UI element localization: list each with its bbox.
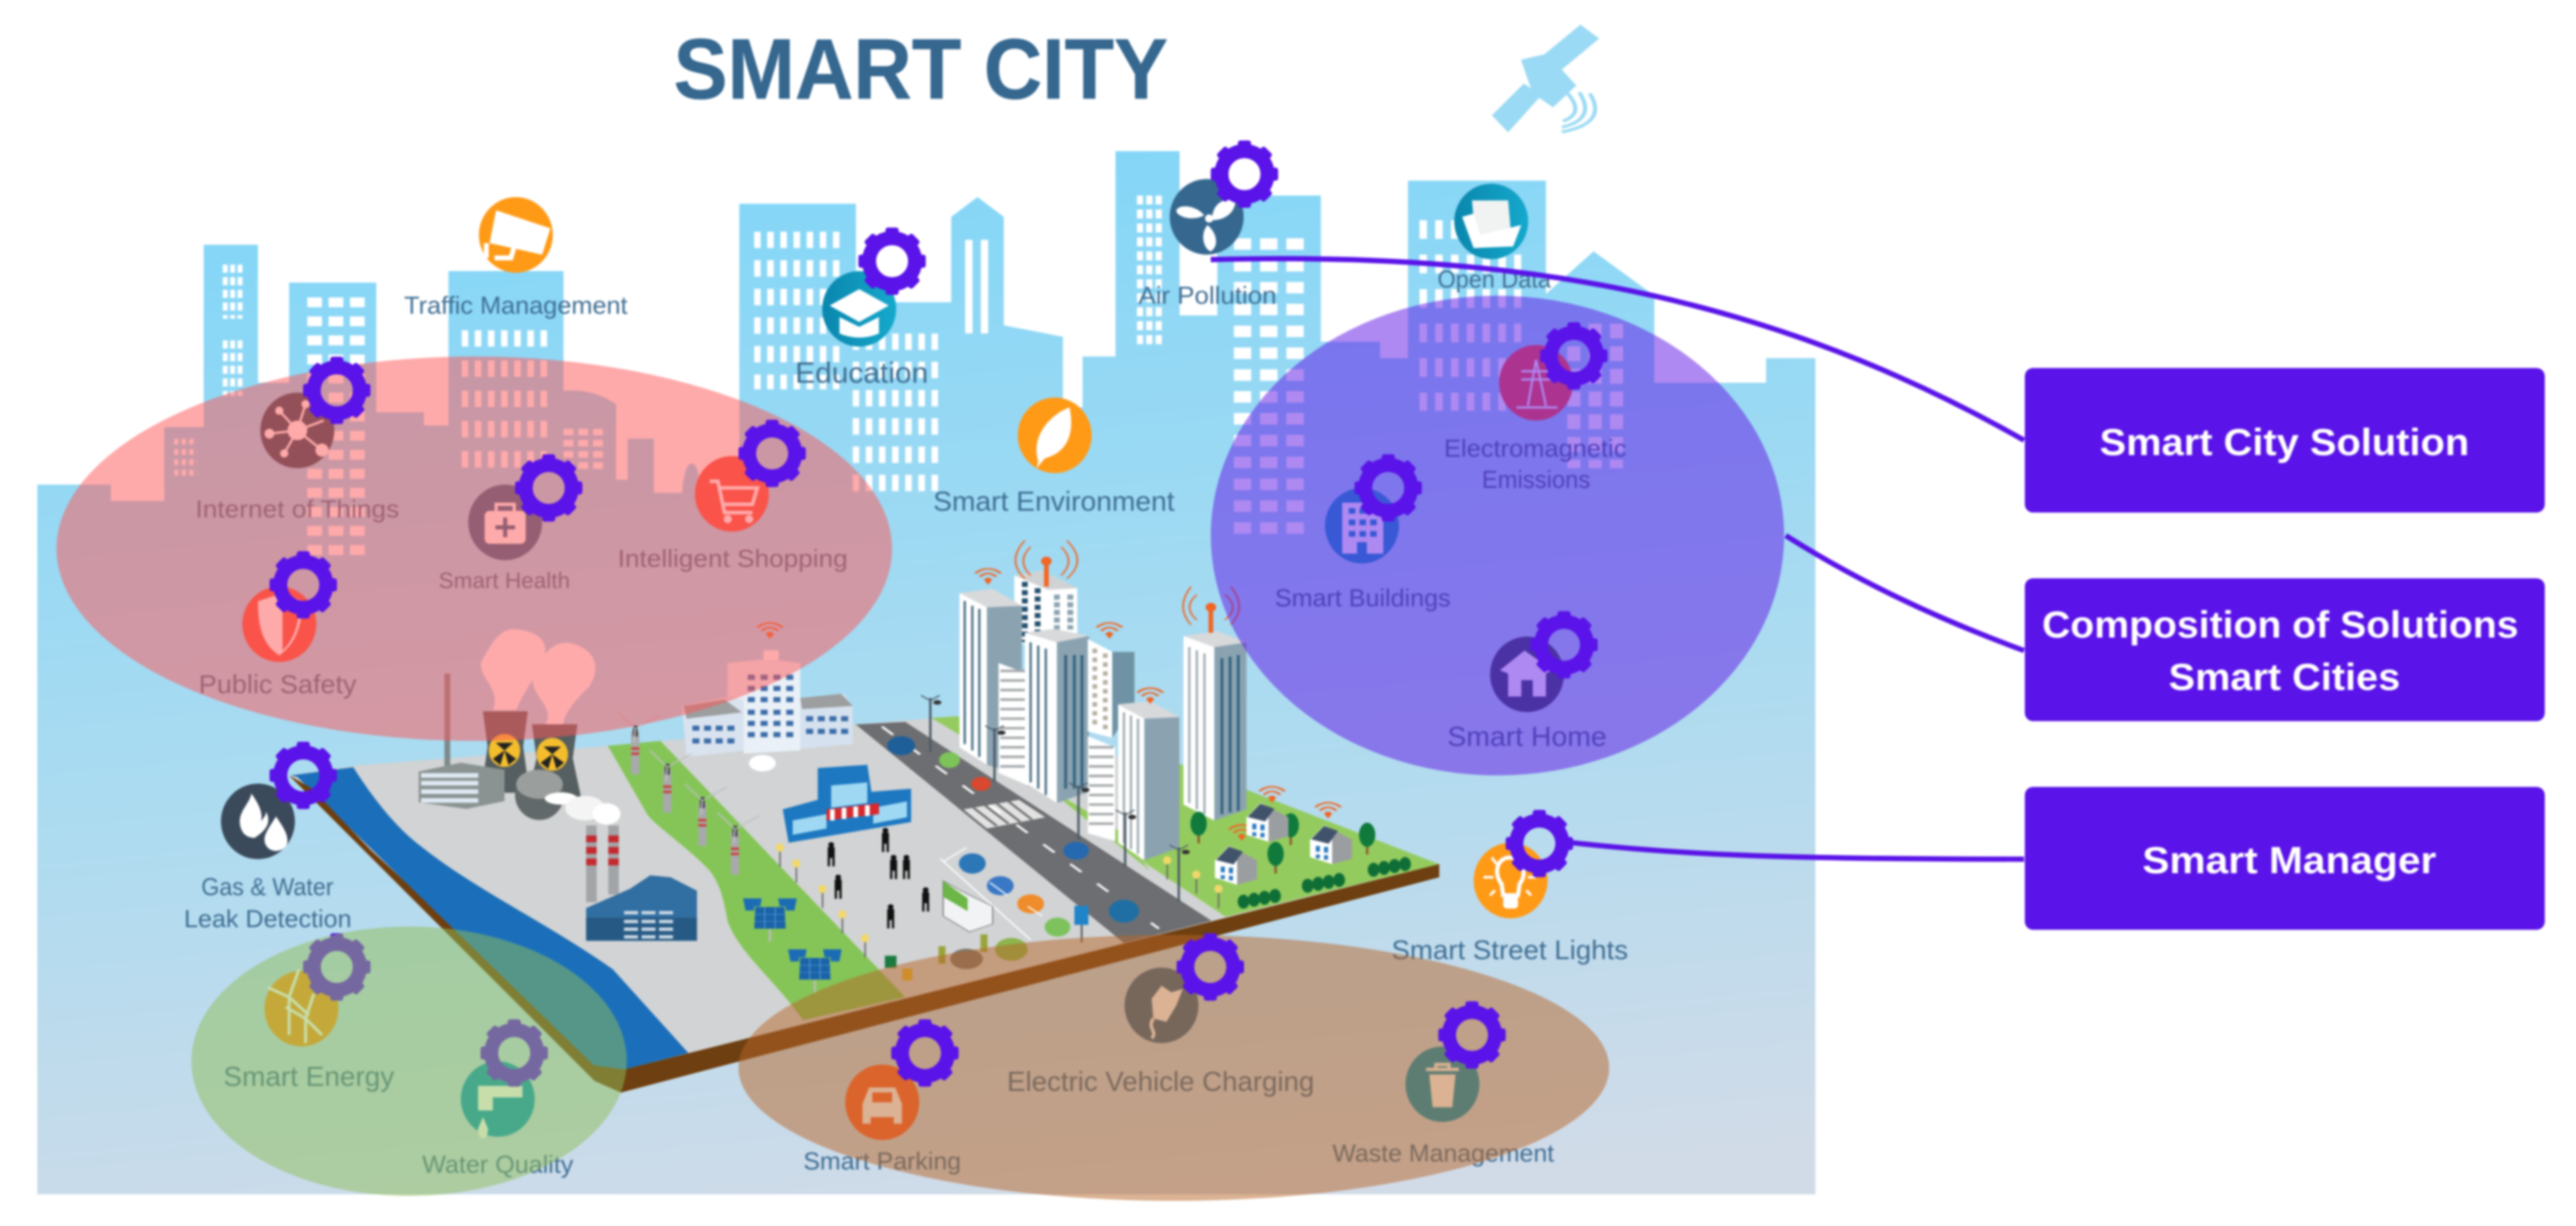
platform base and river: [289, 716, 1439, 1092]
gear: intelligent shopping: [738, 420, 805, 487]
label: electromagnetic emissions: [1444, 435, 1627, 494]
label: internet of things: Internet of Things: [195, 496, 399, 524]
cars and parking: [884, 736, 1139, 981]
label: smart energy: Smart Energy: [224, 1061, 395, 1092]
solar panels: [743, 899, 842, 992]
label: waste management: Waste Management: [1332, 1140, 1554, 1167]
box: smart manager: Smart Manager: [2142, 839, 2436, 881]
icon: internet of things: [260, 392, 334, 468]
box: smart city solution: Smart City Solution: [2100, 421, 2470, 463]
label: smart parking: Smart Parking: [803, 1148, 961, 1175]
icon: smart street lights: [1474, 843, 1548, 918]
icon: public safety: [243, 587, 316, 662]
gear: smart street lights: [1505, 810, 1573, 877]
hospital: [682, 650, 853, 771]
icon: waste management: [1406, 1046, 1480, 1122]
gear: electric vehicle charging: [1176, 933, 1244, 1001]
antennas and wifi signals: [757, 540, 1341, 841]
street lamps and poles: [776, 696, 1223, 958]
icon: satellite: [1492, 25, 1599, 132]
gear: water quality: [480, 1019, 548, 1086]
icon: education: [822, 271, 896, 347]
icon: smart environment leaf: [1017, 397, 1091, 473]
houses, trees, bushes: [1190, 803, 1411, 908]
box: smart city solution: [2025, 368, 2544, 513]
towers: [959, 571, 1246, 860]
icon: intelligent shopping: [695, 456, 769, 532]
icon: smart parking: [845, 1065, 919, 1140]
label: water quality: Water Quality: [422, 1151, 574, 1179]
icon: traffic camera: [479, 197, 553, 273]
icon: water quality: [461, 1061, 534, 1139]
turbines: [618, 712, 760, 874]
label: air pollution: Air Pollution: [1139, 283, 1277, 310]
connector: street lights gear to smart manager: [1572, 843, 2024, 859]
centre and right: road, towers, store, cars, houses: [618, 540, 1411, 992]
label: electromagnetic emissions: Electromagnetic: [1444, 435, 1627, 462]
label: intelligent shopping: Intelligent Shopping: [618, 545, 848, 573]
gear: education: [859, 228, 926, 295]
connector: purple zone to composition of solutions: [1785, 535, 2024, 651]
label: education: Education: [795, 357, 928, 390]
zone: green ellipse: [191, 927, 627, 1196]
icon: gas and water leak detection: [221, 784, 295, 859]
gear: public safety: [269, 551, 337, 618]
gear: smart parking: [891, 1019, 958, 1086]
label: public safety: Public Safety: [199, 669, 357, 699]
zone: red ellipse: [57, 357, 892, 741]
gear: air pollution: [1211, 140, 1278, 208]
gear: internet of things: [303, 357, 371, 424]
gear: gas and water: [269, 741, 337, 809]
zone: brown ellipse: [738, 935, 1609, 1201]
label: smart home: Smart Home: [1447, 721, 1607, 752]
label: smart environment: Smart Environment: [933, 487, 1175, 518]
gear: smart home: [1530, 611, 1598, 678]
label: gas and water leak detection: [184, 874, 352, 933]
icon: smart home: [1490, 637, 1564, 712]
title: SMART CITY: [673, 22, 1168, 117]
gear: smart energy: [303, 933, 371, 1001]
icon: smart buildings: [1325, 488, 1399, 564]
gear: smart health: [515, 454, 583, 522]
gear: smart buildings: [1355, 454, 1422, 522]
label: gas and water leak detection: Leak Detection: [184, 906, 352, 933]
icon: smart health: [468, 485, 542, 560]
label: smart street lights: Smart Street Lights: [1391, 934, 1628, 965]
gear: waste management: [1438, 1002, 1505, 1069]
connector: air pollution to smart city solution: [1211, 258, 2024, 441]
city platform illustration: [289, 540, 1439, 1092]
road: [855, 721, 1211, 943]
gear: electromagnetic emissions: [1540, 323, 1608, 390]
label: open data: Open Data: [1437, 266, 1551, 293]
icon: electromagnetic emissions: [1499, 345, 1573, 421]
label: smart health: Smart Health: [439, 569, 570, 593]
label: traffic management: Traffic Management: [404, 292, 628, 319]
label: smart buildings: Smart Buildings: [1275, 584, 1451, 612]
icon: electric vehicle charging: [1125, 968, 1199, 1043]
label: electric vehicle charging: Electric Vehicle Charging: [1007, 1066, 1314, 1097]
box: composition of solutions smart cities: Smart Cities: [2169, 656, 2401, 698]
zone: purple ellipse: [1211, 296, 1784, 775]
icon: smart energy: [264, 969, 338, 1046]
box: composition of solutions smart cities: Composition of Solutions: [2042, 603, 2519, 646]
store: [783, 765, 911, 843]
left side: power plant and factory: [419, 629, 697, 941]
skyline background: [37, 151, 1815, 1194]
pedestrians: [828, 828, 929, 928]
box: composition of solutions smart cities: [2025, 579, 2544, 721]
box: smart manager: [2025, 787, 2544, 930]
icon: open data: [1455, 184, 1528, 259]
label: electromagnetic emissions: Emissions: [1482, 466, 1590, 494]
icon: air pollution: [1170, 179, 1244, 254]
label: gas and water leak detection: Gas & Water: [201, 874, 333, 901]
